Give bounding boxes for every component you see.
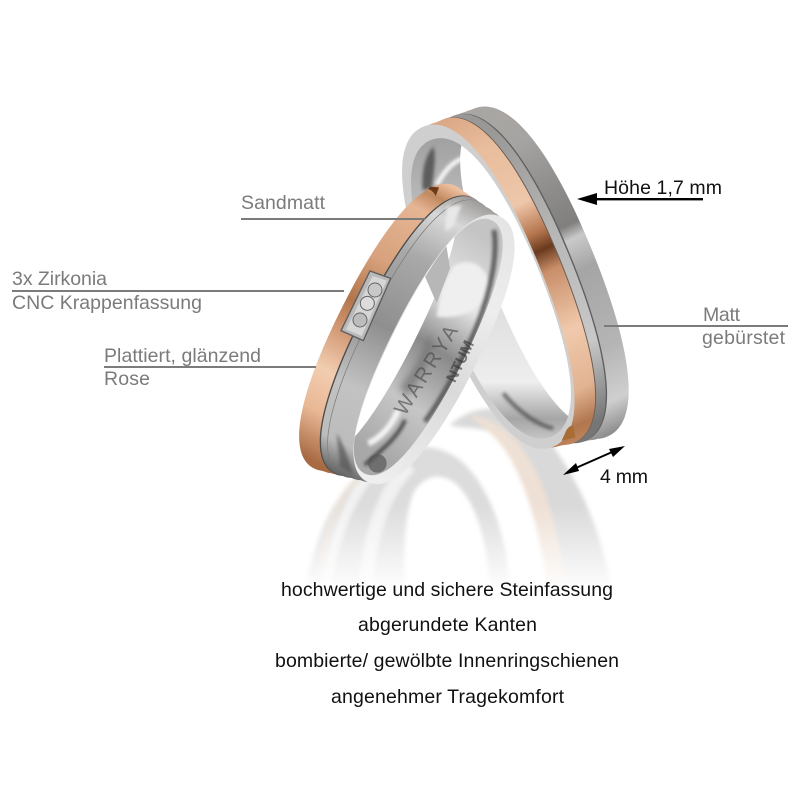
- label: 3x Zirkonia CNC Krappenfassung: CNC Krappenfassung: [12, 292, 202, 314]
- label: Matt gebürstet: gebürstet: [702, 327, 786, 349]
- back ring outer band: [402, 106, 629, 448]
- polished notch on gold strip: [428, 187, 439, 196]
- label: 3x Zirkonia CNC Krappenfassung: [12, 268, 344, 314]
- zirconia stone setting: [341, 271, 391, 341]
- label: Sandmatt: Sandmatt: [241, 192, 326, 214]
- feature list: hochwertige und sichere Steinfassung: [281, 579, 613, 601]
- dimension: width 4 mm: [563, 446, 648, 488]
- see-through gap with back ring leg: [355, 236, 455, 436]
- feature list: [275, 579, 619, 708]
- label: Matt gebürstet: [604, 304, 788, 349]
- reflection of the rings: [312, 408, 606, 576]
- engraved text: NTUM: [443, 338, 478, 385]
- dimension: height 1.7 mm: [577, 177, 722, 205]
- front ring inner surface: [354, 218, 503, 476]
- label: Matt gebürstet: Matt: [703, 304, 741, 326]
- back ring inside surface and opening: [411, 138, 571, 438]
- feature list: bombierte/ gewölbte Innenringschienen: [275, 650, 619, 672]
- ring pair: [299, 106, 629, 484]
- front ring outer band: [299, 184, 514, 484]
- label: Plattiert glänzend Rose: Plattiert, glänzend: [104, 345, 261, 367]
- label: Plattiert glänzend Rose: Rose: [104, 368, 150, 390]
- dimension: width 4 mm: 4 mm: [600, 466, 648, 488]
- engraved text: WARRYA: [390, 319, 464, 419]
- feature list: angenehmer Tragekomfort: [331, 686, 565, 708]
- feature list: abgerundete Kanten: [358, 614, 537, 636]
- dark gold notch at foot of back ring: [562, 426, 575, 441]
- dimension: height 1.7 mm: Höhe 1,7 mm: [604, 177, 722, 199]
- label: 3x Zirkonia CNC Krappenfassung: 3x Zirkonia: [12, 268, 107, 290]
- label: Plattiert glänzend Rose: [104, 345, 316, 390]
